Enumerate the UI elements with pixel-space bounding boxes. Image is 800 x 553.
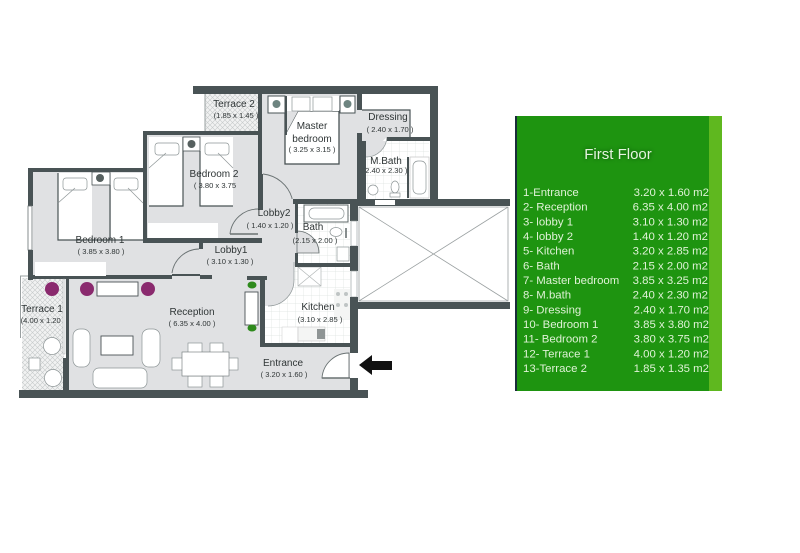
terrace 1 xyxy=(20,276,66,391)
kitchen: Kitchen xyxy=(301,302,335,313)
room list: 1-Entrance xyxy=(523,187,579,199)
room list: 2.40 x 1.70 m2 xyxy=(634,304,709,316)
floor plan xyxy=(19,86,510,398)
counter and sink xyxy=(282,327,325,343)
room list: 3- lobby 1 xyxy=(523,216,573,228)
kitchen: (3.10 x 2.85 ) xyxy=(298,315,343,324)
stove xyxy=(334,289,350,319)
master bath: (2.40 x 2.30 ) xyxy=(363,166,408,175)
door swings xyxy=(172,174,292,273)
terrace 2: (1.85 x 1.45 ) xyxy=(214,111,259,120)
room list: 2.40 x 2.30 m2 xyxy=(633,290,708,302)
flowers xyxy=(80,282,155,296)
room list: 6- Bath xyxy=(523,260,560,272)
kitchen xyxy=(265,262,350,343)
room list: 13-Terrace 2 xyxy=(523,363,587,375)
bed xyxy=(285,96,339,164)
reception: ( 6.35 x 4.00 ) xyxy=(169,319,216,328)
terrace 1: Terrace 1 xyxy=(21,304,63,315)
room list: 2.15 x 2.00 m2 xyxy=(633,260,708,272)
wardrobe xyxy=(148,223,218,238)
room list: 10- Bedroom 1 xyxy=(523,319,598,331)
bedroom 1: ( 3.85 x 3.80 ) xyxy=(78,247,125,256)
toilet and sink xyxy=(368,181,400,197)
room list: 11- Bedroom 2 xyxy=(523,334,598,346)
room list: 9- Dressing xyxy=(523,304,581,316)
toilet and sink xyxy=(330,228,349,261)
terrace chairs and table xyxy=(29,338,62,386)
sofa set xyxy=(73,329,160,388)
bedroom 2: ( 3.80 x 3.75 xyxy=(194,181,236,190)
lobby 2 xyxy=(247,208,294,230)
wardrobe xyxy=(35,262,106,276)
room list: 2- Reception xyxy=(523,202,588,214)
panel: area schedule xyxy=(515,116,722,391)
terrace 2 xyxy=(205,94,259,131)
master bath: M.Bath xyxy=(370,156,402,167)
room list: 3.20 x 1.60 m2 xyxy=(634,187,709,199)
nightstand xyxy=(92,172,110,185)
room list: 12- Terrace 1 xyxy=(523,348,590,360)
reception: Reception xyxy=(169,307,215,318)
room list: 3.20 x 2.85 m2 xyxy=(633,246,708,258)
reception xyxy=(73,282,258,388)
bedroom 2: Bedroom 2 xyxy=(190,169,239,180)
bedroom 1 xyxy=(35,172,143,276)
master bath xyxy=(362,137,429,199)
terrace 1: (4.00 x 1.20 ) xyxy=(21,316,66,325)
walls xyxy=(19,86,510,398)
master bedroom: Master xyxy=(297,121,328,132)
entrance: ( 3.20 x 1.60 ) xyxy=(261,370,308,379)
heading: First Floor xyxy=(584,146,652,163)
room list: 6.35 x 4.00 m2 xyxy=(633,202,708,214)
room list: 8- M.bath xyxy=(523,290,571,302)
dressing: ( 2.40 x 1.70 ) xyxy=(367,125,414,134)
bath: Bath xyxy=(303,222,323,233)
room list: 3.85 x 3.80 m2 xyxy=(634,319,709,331)
bedroom 2 xyxy=(148,137,239,238)
floor area xyxy=(33,94,410,391)
master bedroom: bedroom xyxy=(292,134,332,145)
sideboard xyxy=(97,282,138,296)
room list: 4.00 x 1.20 m2 xyxy=(634,348,709,360)
bath xyxy=(293,204,350,264)
beds xyxy=(149,137,233,206)
room list: 5- Kitchen xyxy=(523,246,574,258)
lobby 1 xyxy=(207,245,254,266)
room list: 1.85 x 1.35 m2 xyxy=(634,363,709,375)
lobby 2: Lobby2 xyxy=(258,208,291,219)
icon: terrace plant xyxy=(45,282,59,296)
dressing: Dressing xyxy=(368,112,408,123)
master bedroom xyxy=(268,96,355,164)
beds xyxy=(58,173,143,240)
bathtub xyxy=(410,157,429,198)
heading: First Floor xyxy=(584,146,652,163)
entrance: Entrance xyxy=(263,358,303,369)
room list: 3.10 x 1.30 m2 xyxy=(633,216,708,228)
terrace 2: Terrace 2 xyxy=(213,99,255,110)
master bedroom: ( 3.25 x 3.15 ) xyxy=(289,145,336,154)
room list: 1.40 x 1.20 m2 xyxy=(633,231,708,243)
nightstand xyxy=(183,137,200,151)
bathtub xyxy=(304,205,348,222)
room list: 3.80 x 3.75 m2 xyxy=(634,334,709,346)
room list: 3.85 x 3.25 m2 xyxy=(633,275,708,287)
bedroom 1: Bedroom 1 xyxy=(76,235,125,246)
lobby 2: ( 1.40 x 1.20 ) xyxy=(247,221,294,230)
arrow: entrance xyxy=(359,355,392,375)
wall unit and plants xyxy=(245,282,258,332)
entrance xyxy=(261,353,358,379)
dining table xyxy=(172,343,238,387)
room list: 7- Master bedroom xyxy=(523,275,619,287)
lobby 1: ( 3.10 x 1.30 ) xyxy=(207,257,254,266)
nightstands xyxy=(268,96,355,113)
room list: 4- lobby 2 xyxy=(523,231,573,243)
void with cross xyxy=(358,206,510,302)
dressing xyxy=(362,110,414,137)
bath: (2.15 x 2.00 ) xyxy=(293,236,338,245)
shower xyxy=(298,267,321,286)
lobby 1: Lobby1 xyxy=(215,245,248,256)
room list xyxy=(523,187,709,375)
